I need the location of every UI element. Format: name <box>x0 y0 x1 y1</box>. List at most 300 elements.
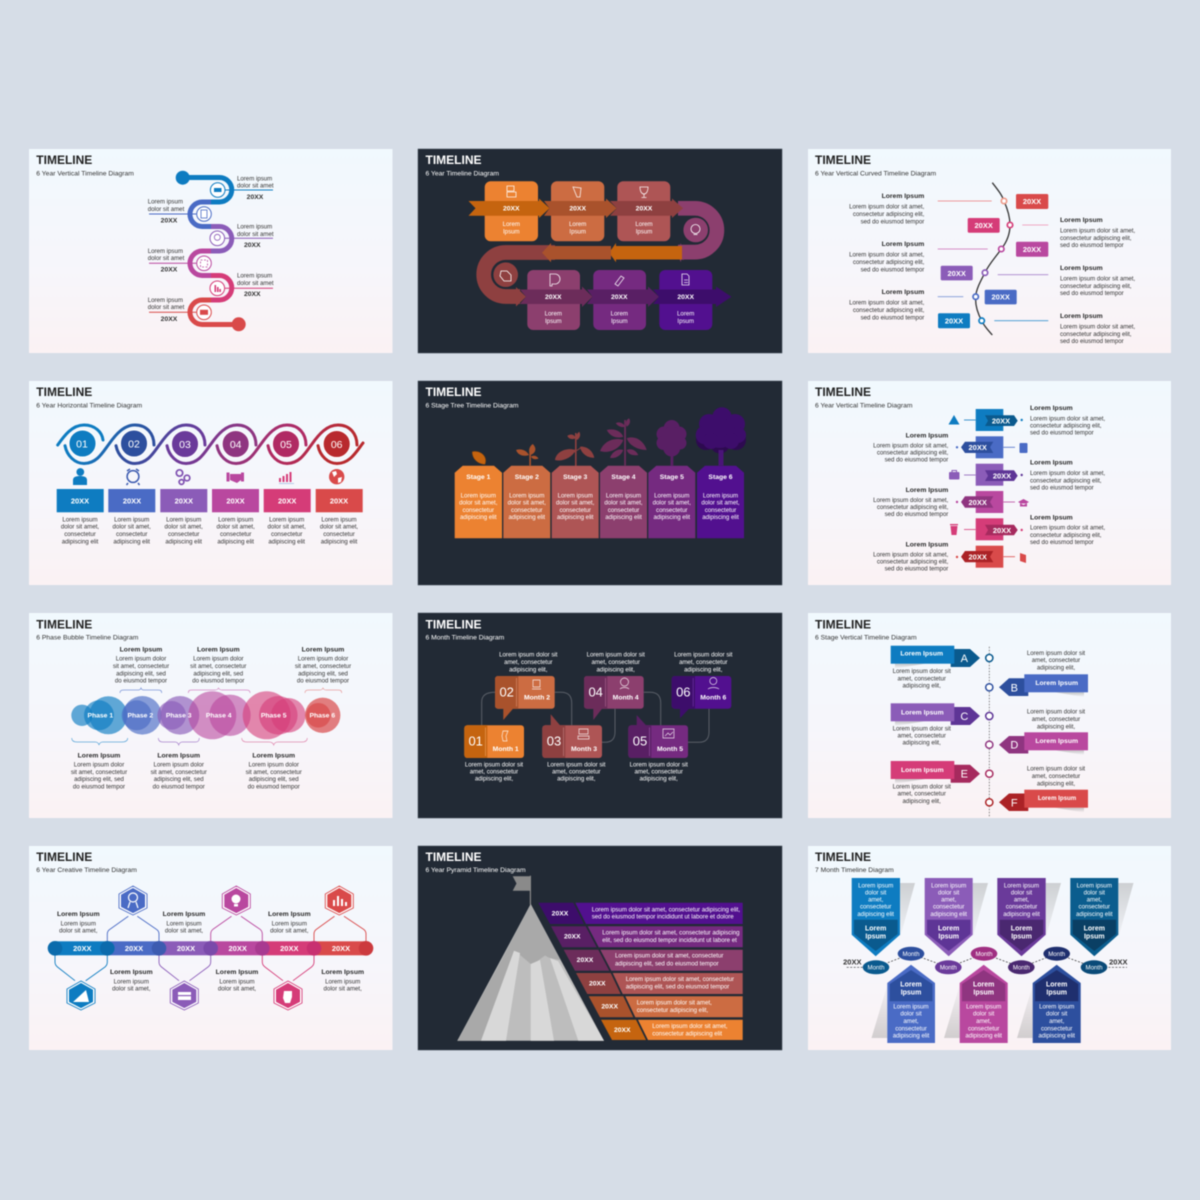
letters: F <box>1011 797 1018 809</box>
subtitle: 6 Phase Bubble Timeline Diagram <box>36 634 139 642</box>
connector lines <box>55 916 366 981</box>
panel: 7 month timeline <box>808 846 1171 1050</box>
top text <box>57 911 311 935</box>
right text: sed do eiusmod tempor <box>1060 338 1124 345</box>
card text: 20XX <box>611 294 628 301</box>
top pentagon text: consectetur <box>1006 904 1037 911</box>
numbers <box>76 438 343 451</box>
bottom pentagon text: Ipsum <box>1046 989 1067 996</box>
leader lines <box>938 201 1048 321</box>
top pentagon text: Lorem <box>1084 926 1105 933</box>
flag <box>513 876 531 905</box>
stage descriptions: adipiscing elit <box>460 514 497 521</box>
ribbon labels: Lorem Ipsum <box>1035 680 1078 687</box>
descriptions: consectetur <box>168 531 199 538</box>
arrow band segments <box>468 198 732 307</box>
top pentagon text: adipiscing elit <box>1003 911 1040 918</box>
left text: consectetur adipiscing elit, <box>877 449 949 456</box>
bottom text: Lorem ipsum <box>114 978 149 985</box>
shadows <box>872 883 1134 1038</box>
card text: 20XX <box>677 294 694 301</box>
ribbon labels: Lorem Ipsum <box>1038 795 1077 802</box>
month ovals: Month <box>1048 951 1065 958</box>
subtitle: 6 Year Pyramid Timeline Diagram <box>426 867 526 874</box>
card labels: Month 4 <box>613 694 639 701</box>
letters <box>960 653 1018 809</box>
right descriptions: Lorem ipsum dolor sit <box>1027 650 1085 657</box>
title: TIMELINE <box>36 153 92 167</box>
card text: Lorem <box>503 221 520 228</box>
stage headings: Stage 3 <box>563 474 588 481</box>
card text: Lorem <box>611 311 628 318</box>
descriptions: adipiscing elit <box>62 538 99 545</box>
ribbon labels: Lorem Ipsum <box>901 710 944 717</box>
descriptions: Lorem ipsum <box>269 516 304 523</box>
bar years: 20XX <box>280 944 298 953</box>
top text: Lorem ipsum <box>272 920 307 927</box>
panel: 6 stage tree timeline <box>418 381 782 585</box>
left descriptions: amet, consectetur <box>897 675 946 682</box>
top pentagon text: Ipsum <box>1084 934 1105 941</box>
bottom text groups: do eiusmod tempor <box>73 783 125 790</box>
right descriptions: adipiscing elit, <box>1037 780 1075 787</box>
right text: Lorem Ipsum <box>1030 405 1073 412</box>
left text: Lorem Ipsum <box>882 289 924 296</box>
right text <box>1030 405 1105 546</box>
card icons <box>507 186 689 286</box>
letters: B <box>1011 682 1018 694</box>
subtitle: 6 Year Creative Timeline Diagram <box>36 867 137 874</box>
bottom pentagon text: Lorem ipsum <box>893 1004 929 1011</box>
tier text: Lorem ipsum dolor sit amet, consectetur <box>615 952 723 959</box>
top text: Lorem ipsum <box>166 920 202 927</box>
title: TIMELINE <box>36 385 92 399</box>
phase labels: Phase 4 <box>206 713 232 720</box>
stage descriptions: dolor sit amet, <box>604 500 643 507</box>
tier text: Lorem ipsum dolor sit amet, <box>637 999 712 1006</box>
left text: consectetur adipiscing elit, <box>877 559 949 566</box>
title: TIMELINE <box>36 618 92 632</box>
top pentagon text: Lorem ipsum <box>1077 882 1112 889</box>
bottom text: amet, consectetur <box>634 768 683 775</box>
bottom pentagon text <box>893 981 1075 1039</box>
stage descriptions: Lorem ipsum <box>654 492 689 499</box>
left text: sed do eiusmod tempor <box>885 511 948 518</box>
text 6: dolor sit amet <box>148 304 185 311</box>
text 3: Lorem ipsum <box>237 224 272 230</box>
left text: Lorem ipsum dolor sit amet, <box>873 497 949 504</box>
top pentagon text: amet, <box>941 897 957 904</box>
end year: 20XX <box>1109 958 1127 966</box>
nodes <box>973 198 1013 323</box>
right descriptions: adipiscing elit, <box>1037 723 1075 730</box>
left text: sed do eiusmod tempor <box>861 266 924 273</box>
top text groups: Lorem ipsum dolor <box>116 656 166 663</box>
stage descriptions: dolor sit amet, <box>556 500 595 507</box>
plant growth stages <box>472 407 746 466</box>
right text: Lorem Ipsum <box>1060 265 1103 272</box>
year boxes: 20XX <box>278 496 296 505</box>
top pentagon text: Lorem ipsum <box>858 882 893 889</box>
card text: Ipsum <box>569 228 586 235</box>
stage descriptions: adipiscing elit <box>557 514 594 521</box>
left text: sed do eiusmod tempor <box>885 566 948 573</box>
subtitle: 6 Year Timeline Diagram <box>426 170 499 177</box>
bottom text: amet, consectetur <box>470 768 518 775</box>
year labels and text: dolor sit amet <box>237 183 274 190</box>
icons <box>948 415 1029 563</box>
ribbons and tags <box>891 646 1088 811</box>
bottom text: Lorem ipsum dolor sit <box>547 761 606 768</box>
stage descriptions: consectetur <box>705 507 736 514</box>
descriptions: dolor sit amet, <box>268 524 306 531</box>
stage descriptions: consectetur <box>463 507 494 514</box>
left descriptions: amet, consectetur <box>897 733 946 740</box>
stage descriptions: consectetur <box>511 507 543 514</box>
bottom text groups: do eiusmod tempor <box>153 783 205 790</box>
ribbons: 20XX <box>993 526 1011 535</box>
start year: 20XX <box>843 958 861 966</box>
top text <box>499 652 733 673</box>
card numbers: 05 <box>633 733 647 748</box>
left text: Lorem ipsum dolor sit amet, <box>849 204 925 211</box>
panel: 6 year vertical timeline <box>29 149 392 353</box>
text 4: dolor sit amet <box>148 255 185 262</box>
axis nodes <box>986 654 993 806</box>
top pentagon text: Ipsum <box>1011 934 1032 941</box>
year boxes: 20XX <box>330 496 348 505</box>
right text: sed do eiusmod tempor <box>1030 430 1094 437</box>
text 2: Lorem ipsum <box>148 199 183 206</box>
bottom pentagon text: dolor sit <box>900 1011 922 1018</box>
stage headings: Stage 5 <box>660 474 684 481</box>
bottom text: dolor sit amet, <box>218 986 256 993</box>
right text: Lorem ipsum dolor sit amet, <box>1060 228 1135 235</box>
left descriptions: adipiscing elit, <box>903 682 941 689</box>
panel: 6 month timeline dark <box>418 613 782 818</box>
month ovals: Month <box>976 951 992 958</box>
hexagon icons top <box>119 886 353 915</box>
tier years: 20XX <box>552 910 569 917</box>
stage descriptions: adipiscing elit <box>702 514 739 521</box>
right text: consectetur adipiscing elit, <box>1030 532 1102 539</box>
month ovals: Month <box>903 951 919 958</box>
top text groups: do eiusmod tempor <box>297 678 349 685</box>
left text: consectetur adipiscing elit, <box>877 504 949 511</box>
panel: 6 phase bubble timeline <box>29 613 392 818</box>
year boxes: 20XX <box>992 293 1010 302</box>
bottom pentagon text: Lorem <box>1046 981 1067 988</box>
phase labels: Phase 2 <box>127 713 153 720</box>
top text groups: Lorem Ipsum <box>197 646 240 653</box>
card text: 20XX <box>503 206 520 212</box>
left text: sed do eiusmod tempor <box>861 314 924 321</box>
right text: sed do eiusmod tempor <box>1060 242 1124 249</box>
bottom text: Lorem ipsum dolor sit <box>630 761 688 768</box>
top pentagon text: adipiscing elit <box>857 911 894 918</box>
top pentagon text: dolor sit <box>865 889 887 896</box>
card numbers: 03 <box>547 733 561 748</box>
top pentagon text: adipiscing elit <box>930 911 967 918</box>
right text: Lorem Ipsum <box>1060 313 1103 320</box>
bottom pentagon text: Lorem <box>900 981 922 988</box>
ribbons: 20XX <box>969 443 987 452</box>
squares <box>976 409 1003 568</box>
bottom pentagon text: Lorem ipsum <box>1039 1004 1074 1011</box>
year boxes <box>57 489 363 512</box>
top text groups: sit amet, consectetur <box>190 663 246 670</box>
descriptions: Lorem ipsum <box>218 516 253 523</box>
phase labels: Phase 1 <box>87 713 113 720</box>
bottom pentagon text: amet, <box>1049 1018 1065 1025</box>
left text <box>873 432 949 573</box>
top pentagon text: dolor sit <box>1084 889 1105 896</box>
top text groups: adipiscing elit, sed <box>193 670 243 677</box>
card labels: Month 2 <box>524 694 550 701</box>
top text: dolor sit amet, <box>270 928 309 935</box>
tier text <box>592 906 740 1037</box>
stage descriptions: consectetur <box>608 507 639 514</box>
bottom pentagon text: consectetur <box>968 1025 999 1032</box>
bar nodes <box>48 941 373 956</box>
tier years: 20XX <box>614 1027 631 1034</box>
subtitle: 6 Month Timeline Diagram <box>426 634 505 642</box>
stage descriptions: dolor sit amet, <box>701 500 740 507</box>
year boxes: 20XX <box>71 496 89 505</box>
year boxes: 20XX <box>945 316 963 326</box>
top pentagon text: Lorem <box>865 926 886 933</box>
top pentagon text: amet, <box>868 897 884 904</box>
card labels: Month 3 <box>571 746 597 753</box>
stage descriptions: adipiscing elit <box>654 514 690 521</box>
stage descriptions: Lorem ipsum <box>606 492 641 499</box>
title: TIMELINE <box>426 618 482 632</box>
right text <box>1060 217 1135 345</box>
tier years <box>552 910 631 1034</box>
year 3: 20XX <box>244 242 261 249</box>
top text: adipiscing elit, <box>597 666 635 673</box>
bar years <box>73 944 350 953</box>
card text: Ipsum <box>545 318 562 325</box>
text 2: dolor sit amet <box>148 206 185 213</box>
card labels: Month 1 <box>493 746 519 753</box>
bottom text: Lorem ipsum <box>325 978 360 985</box>
right text: consectetur adipiscing elit, <box>1060 235 1132 242</box>
bottom text: Lorem Ipsum <box>321 969 364 976</box>
bottom text groups: Lorem Ipsum <box>157 752 200 759</box>
right text: Lorem ipsum dolor sit amet, <box>1030 415 1105 422</box>
dashed axis <box>988 647 990 817</box>
right text: Lorem ipsum dolor sit amet, <box>1060 276 1135 283</box>
top text: dolor sit amet, <box>59 928 98 935</box>
top text groups: Lorem Ipsum <box>302 646 344 653</box>
year boxes: 20XX <box>1023 197 1041 206</box>
bottom pentagon text: dolor sit <box>973 1011 995 1018</box>
top text: adipiscing elit, <box>509 666 548 673</box>
tier text: Lorem ipsum dolor sit amet, consectetur adipiscing <box>602 930 739 937</box>
stage headings: Stage 2 <box>515 474 539 481</box>
bottom text: adipiscing elit, <box>475 776 513 783</box>
card numbers: 04 <box>588 684 603 700</box>
serpentine path <box>176 171 246 331</box>
right descriptions: amet, consectetur <box>1032 773 1080 780</box>
left text: Lorem ipsum dolor sit amet, <box>873 552 949 559</box>
stage descriptions: adipiscing elit <box>605 514 642 521</box>
card text: Ipsum <box>636 228 652 235</box>
top pentagon text: adipiscing elit <box>1076 911 1113 918</box>
top text groups: Lorem ipsum dolor <box>298 656 348 663</box>
year boxes: 20XX <box>1023 245 1041 254</box>
bottom text groups: Lorem Ipsum <box>252 752 295 759</box>
panel: 6 year creative timeline <box>29 846 392 1050</box>
right text: consectetur adipiscing elit, <box>1060 331 1132 338</box>
left descriptions: Lorem ipsum dolor sit <box>893 784 951 791</box>
text 5: dolor sit amet <box>237 280 274 287</box>
card text: 20XX <box>569 206 586 212</box>
top pentagon text <box>857 882 1113 941</box>
stage headings: Stage 1 <box>466 474 491 481</box>
month ovals: Month <box>1086 964 1102 972</box>
bottom pentagon text: Lorem <box>973 981 994 988</box>
left text: Lorem Ipsum <box>906 542 948 549</box>
top pentagon text: Ipsum <box>938 934 959 941</box>
left descriptions: adipiscing elit, <box>903 740 941 747</box>
descriptions: Lorem ipsum <box>321 516 357 523</box>
left descriptions: adipiscing elit, <box>903 798 941 805</box>
connectors <box>482 692 709 742</box>
descriptions: adipiscing elit <box>165 538 202 545</box>
letters: C <box>960 711 968 723</box>
tier years: 20XX <box>601 1004 618 1011</box>
month ovals: Month <box>1013 964 1030 972</box>
bubbles <box>71 691 340 739</box>
descriptions: dolor sit amet, <box>217 524 255 531</box>
descriptions: adipiscing elit <box>321 538 358 545</box>
bar years: 20XX <box>332 944 350 953</box>
descriptions: adipiscing elit <box>217 538 254 545</box>
bottom text groups: adipiscing elit, sed <box>249 776 299 783</box>
right text: consectetur adipiscing elit, <box>1030 423 1102 430</box>
year boxes: 20XX <box>948 269 966 278</box>
top text: Lorem Ipsum <box>268 911 311 918</box>
bar segments <box>55 941 366 955</box>
stage descriptions: Lorem ipsum <box>703 492 738 499</box>
card text: Lorem <box>677 311 694 318</box>
bottom pentagon text: Ipsum <box>973 989 994 996</box>
subtitle: 6 Year Vertical Curved Timeline Diagram <box>815 170 937 177</box>
top text groups: sit amet, consectetur <box>113 663 169 670</box>
top pentagon text: Ipsum <box>865 934 886 941</box>
bottom pentagon text: amet, <box>976 1018 992 1025</box>
month ovals: Month <box>940 964 957 972</box>
descriptions: consectetur <box>323 531 355 538</box>
tier text: adipiscing elit, sed do eiusmod tempor <box>626 984 729 991</box>
descriptions: dolor sit amet, <box>165 524 203 531</box>
descriptions: consectetur <box>64 531 96 538</box>
ribbon shadows <box>895 664 1084 812</box>
numbers: 04 <box>230 439 242 451</box>
bottom text <box>465 761 688 783</box>
tier text: elit, sed do eiusmod tempor incididunt ut labore et <box>602 937 737 944</box>
top text groups: sit amet, consectetur <box>295 663 351 670</box>
dashed month path <box>847 954 1127 967</box>
year boxes: 20XX <box>123 496 141 505</box>
bottom pentagon text: adipiscing elit <box>965 1032 1002 1039</box>
left text: sed do eiusmod tempor <box>861 218 924 225</box>
stage descriptions: Lorem ipsum <box>461 492 496 499</box>
top pentagon text: Lorem ipsum <box>1004 882 1039 889</box>
descriptions: consectetur <box>220 531 251 538</box>
right descriptions: Lorem ipsum dolor sit <box>1027 766 1085 773</box>
title: TIMELINE <box>426 850 482 864</box>
stage descriptions: dolor sit amet, <box>459 500 498 507</box>
title: TIMELINE <box>426 385 482 399</box>
descriptions: Lorem ipsum <box>114 516 149 523</box>
bottom text groups: sit amet, consectetur <box>151 769 207 776</box>
top text: Lorem ipsum <box>61 920 96 927</box>
wave ribbon <box>58 425 363 464</box>
title: TIMELINE <box>426 153 482 167</box>
descriptions: adipiscing elit <box>113 538 150 545</box>
panel: 6 year vertical curved timeline <box>808 149 1171 353</box>
left text: Lorem Ipsum <box>906 432 948 439</box>
stage headings <box>466 474 733 481</box>
phase labels: Phase 3 <box>166 713 192 720</box>
card numbers <box>468 684 691 748</box>
stage headings: Stage 6 <box>708 474 733 481</box>
card icons <box>502 678 719 741</box>
right descriptions: adipiscing elit, <box>1037 664 1075 671</box>
left text: Lorem ipsum dolor sit amet, <box>849 300 925 307</box>
ribbons <box>961 415 1018 562</box>
bar years: 20XX <box>125 944 143 953</box>
right descriptions <box>1027 650 1085 787</box>
letters: D <box>1010 740 1018 752</box>
left text: Lorem ipsum dolor sit amet, <box>873 442 949 449</box>
bottom text <box>110 969 364 993</box>
stage descriptions: Lorem ipsum <box>509 492 544 499</box>
bottom text groups: Lorem ipsum dolor <box>153 762 204 769</box>
card text: Lorem <box>545 311 562 318</box>
card text: Lorem <box>569 221 586 228</box>
bottom text: adipiscing elit, <box>640 776 678 783</box>
text 6: Lorem ipsum <box>148 297 183 304</box>
year 5: 20XX <box>244 291 261 298</box>
ribbon labels: Lorem Ipsum <box>900 651 943 658</box>
tier left slabs <box>538 903 646 1040</box>
icons <box>73 468 344 485</box>
bottom text groups: adipiscing elit, sed <box>154 776 204 783</box>
top text groups: adipiscing elit, sed <box>116 670 166 677</box>
card labels: Month 5 <box>657 746 683 753</box>
descriptions: consectetur <box>116 531 147 538</box>
cards <box>485 181 712 330</box>
panel: 6 year timeline dark <box>418 149 782 353</box>
curved ribbon <box>484 208 717 296</box>
tier text: consectetur adipiscing elit, <box>637 1007 708 1014</box>
top pentagon text: amet, <box>1014 897 1029 904</box>
tier right bars <box>575 903 743 1040</box>
panel: 6 year pyramid timeline dark <box>418 846 782 1050</box>
connector lines and dots <box>956 419 1023 558</box>
text 3: dolor sit amet <box>237 231 274 238</box>
year boxes: 20XX <box>175 496 193 505</box>
bottom text: adipiscing elit, <box>557 776 596 783</box>
subtitle: 6 Year Vertical Timeline Diagram <box>36 170 134 177</box>
phase labels <box>87 713 335 720</box>
bar years: 20XX <box>229 944 247 953</box>
letters: A <box>961 653 969 665</box>
